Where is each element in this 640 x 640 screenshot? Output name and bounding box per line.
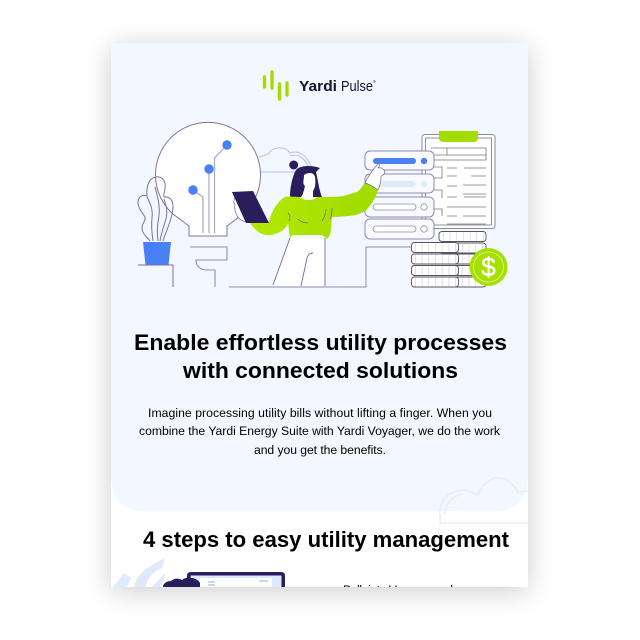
sweater — [250, 183, 378, 239]
pale blue splash — [113, 558, 165, 587]
logo wordmark — [299, 80, 376, 91]
illustration: coin stacks — [412, 232, 486, 287]
logo wordmark: Pulse — [341, 79, 373, 95]
dark cloud — [163, 578, 200, 587]
step 1 illustration — [113, 558, 285, 588]
bulb circuit dots — [188, 140, 232, 195]
icon: dollar coin: $ — [481, 252, 496, 282]
intro paragraph: Imagine processing utility bills without lifting a finger. When you — [148, 406, 492, 420]
intro paragraph — [139, 406, 501, 457]
plant shelf — [138, 265, 173, 287]
icon: dollar coin — [470, 248, 508, 286]
trousers — [273, 238, 325, 286]
heading — [136, 334, 506, 378]
bulb circuit lines — [196, 148, 224, 233]
coin edge ticks — [415, 236, 484, 282]
heading: with connected solutions — [182, 358, 458, 383]
tablet hand — [234, 198, 246, 222]
laptop screen — [187, 572, 285, 587]
bulb base — [190, 247, 227, 287]
active row — [365, 151, 434, 170]
clipboard form lines — [431, 148, 486, 224]
card — [111, 43, 528, 597]
plant pot — [143, 242, 171, 265]
logo — [264, 72, 376, 99]
illustration: light bulb — [156, 122, 260, 287]
intro paragraph: and you get the benefits. — [254, 443, 386, 457]
illustration: server stack — [365, 151, 434, 239]
row 4 — [365, 219, 434, 239]
hair — [289, 160, 322, 197]
illustration: woman — [232, 160, 378, 286]
section heading: 4 steps to easy utility management — [143, 527, 510, 552]
step 1 text, clipped by page edge: Bulk into Voyager and — [343, 583, 453, 597]
face and neck — [301, 173, 315, 200]
decorative cloud — [440, 478, 528, 523]
row 3 — [365, 197, 434, 217]
infographic page — [98, 34, 541, 604]
logo wordmark: ® — [373, 79, 376, 84]
pointing hand — [365, 163, 385, 190]
illustration: clipboard — [422, 131, 495, 228]
icon: pulse bars — [264, 72, 287, 99]
hero panel — [111, 43, 528, 511]
logo wordmark: Yardi — [299, 79, 337, 95]
tablet — [232, 191, 269, 223]
heading: Enable effortless utility processes — [134, 330, 507, 355]
sweater fold lines — [288, 208, 332, 223]
intro paragraph: combine the Yardi Energy Suite with Yardi Voyager, we do the work — [139, 424, 501, 438]
plant leaves — [138, 177, 173, 241]
cloud behind woman — [259, 148, 313, 172]
card shadow — [111, 47, 528, 591]
re-draw sleeve over the server rows — [340, 183, 378, 216]
row 2 — [365, 174, 434, 193]
illustration: potted plant — [138, 177, 173, 287]
clipboard clip — [439, 131, 478, 142]
floor line — [229, 247, 412, 287]
